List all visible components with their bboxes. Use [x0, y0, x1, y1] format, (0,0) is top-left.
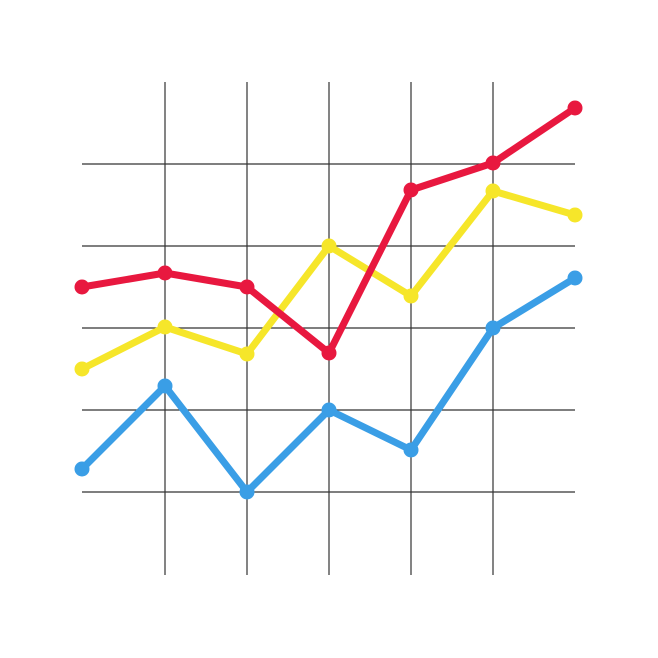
series: blue: [74, 270, 582, 500]
series: red: [74, 100, 582, 360]
series: yellow: [74, 184, 582, 376]
